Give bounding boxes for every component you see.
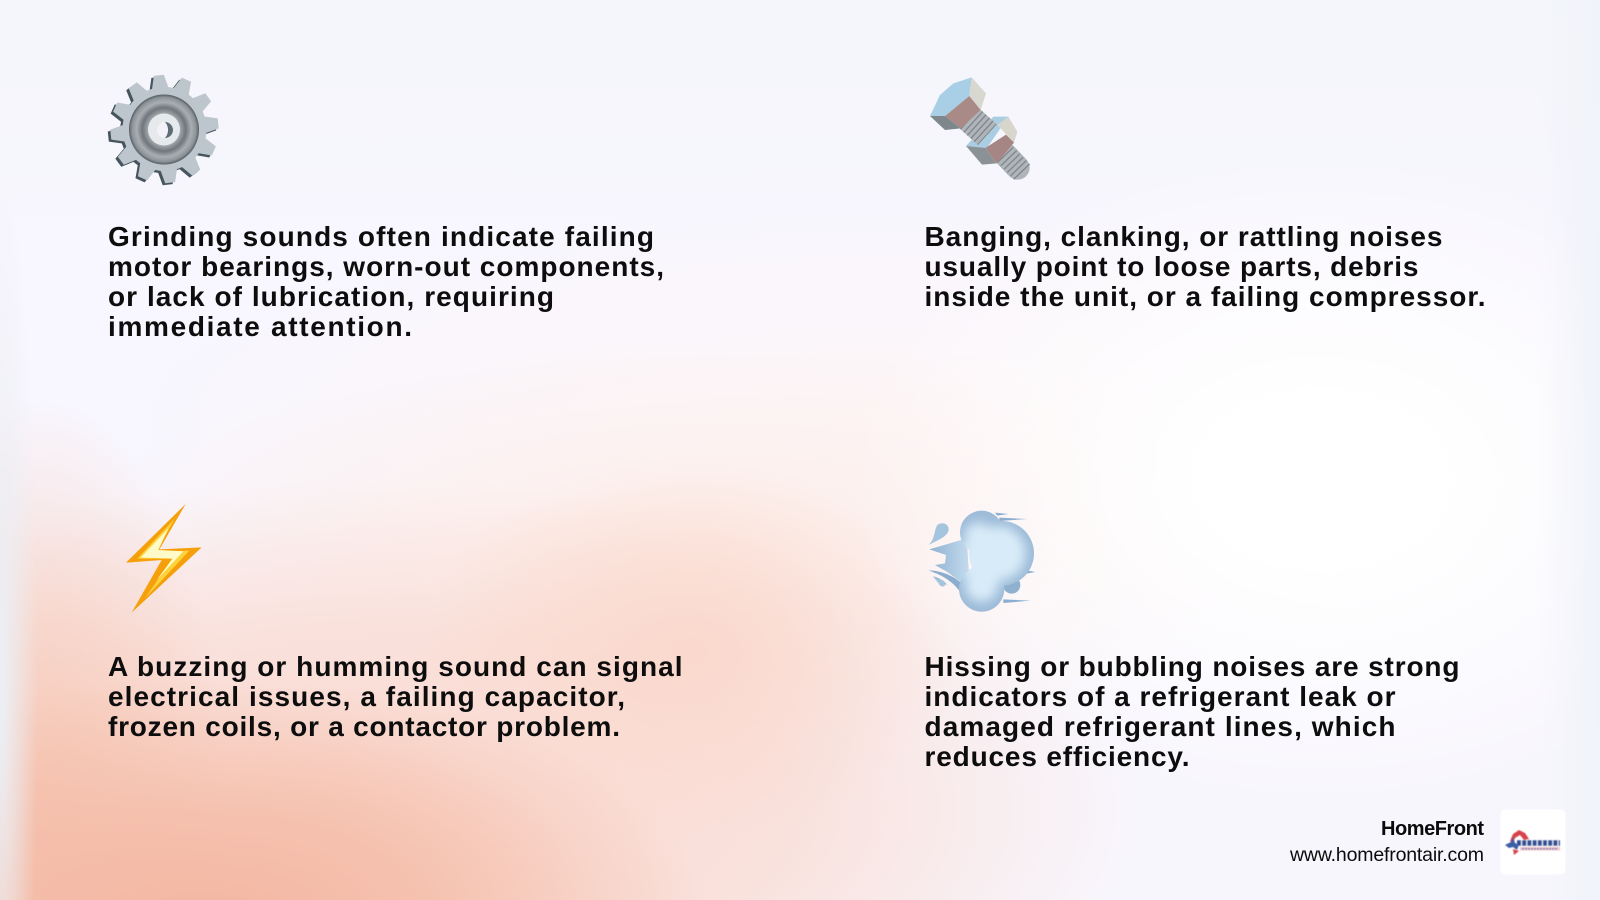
- text: banging and rattling: usually point to loose parts, debris: [924, 251, 1418, 282]
- text: grinding sounds: or lack of lubrication, requiring: [108, 281, 554, 312]
- text: buzzing or humming: electrical issues, a failing capacitor,: [108, 681, 625, 712]
- text: buzzing or humming: frozen coils, or a contactor problem.: [108, 711, 620, 742]
- text: hissing or bubbling: damaged refrigerant lines, which: [924, 711, 1396, 742]
- text: banging and rattling: Banging, clanking, or rattling noises: [924, 221, 1442, 252]
- text: grinding sounds: [108, 221, 664, 342]
- text: grinding sounds: motor bearings, worn-out components,: [108, 251, 664, 282]
- text: hissing or bubbling: [924, 651, 1460, 772]
- icon: dash cloud: [928, 510, 1035, 612]
- brand: HomeFront name and website: www.homefrontair.com: [1289, 844, 1484, 866]
- logo: HomeFront badge: [1500, 810, 1566, 874]
- text: buzzing or humming: A buzzing or humming sound can signal: [108, 651, 682, 682]
- icon: nut and bolt: [930, 78, 1030, 180]
- icon: gear: [108, 74, 219, 186]
- text: hissing or bubbling: indicators of a refrigerant leak or: [924, 681, 1396, 712]
- text: grinding sounds: immediate attention.: [108, 311, 412, 342]
- text: banging and rattling: [924, 221, 1486, 312]
- text: hissing or bubbling: reduces efficiency.: [924, 741, 1190, 772]
- text: buzzing or humming: [108, 651, 682, 742]
- text: hissing or bubbling: Hissing or bubbling noises are strong: [924, 651, 1460, 682]
- brand: HomeFront name and website: [1289, 818, 1484, 866]
- icon: lightning bolt: [126, 504, 202, 612]
- text: grinding sounds: Grinding sounds often indicate failing: [108, 221, 654, 252]
- text: banging and rattling: inside the unit, or a failing compressor.: [924, 281, 1486, 312]
- brand: HomeFront name and website: HomeFront: [1381, 818, 1484, 840]
